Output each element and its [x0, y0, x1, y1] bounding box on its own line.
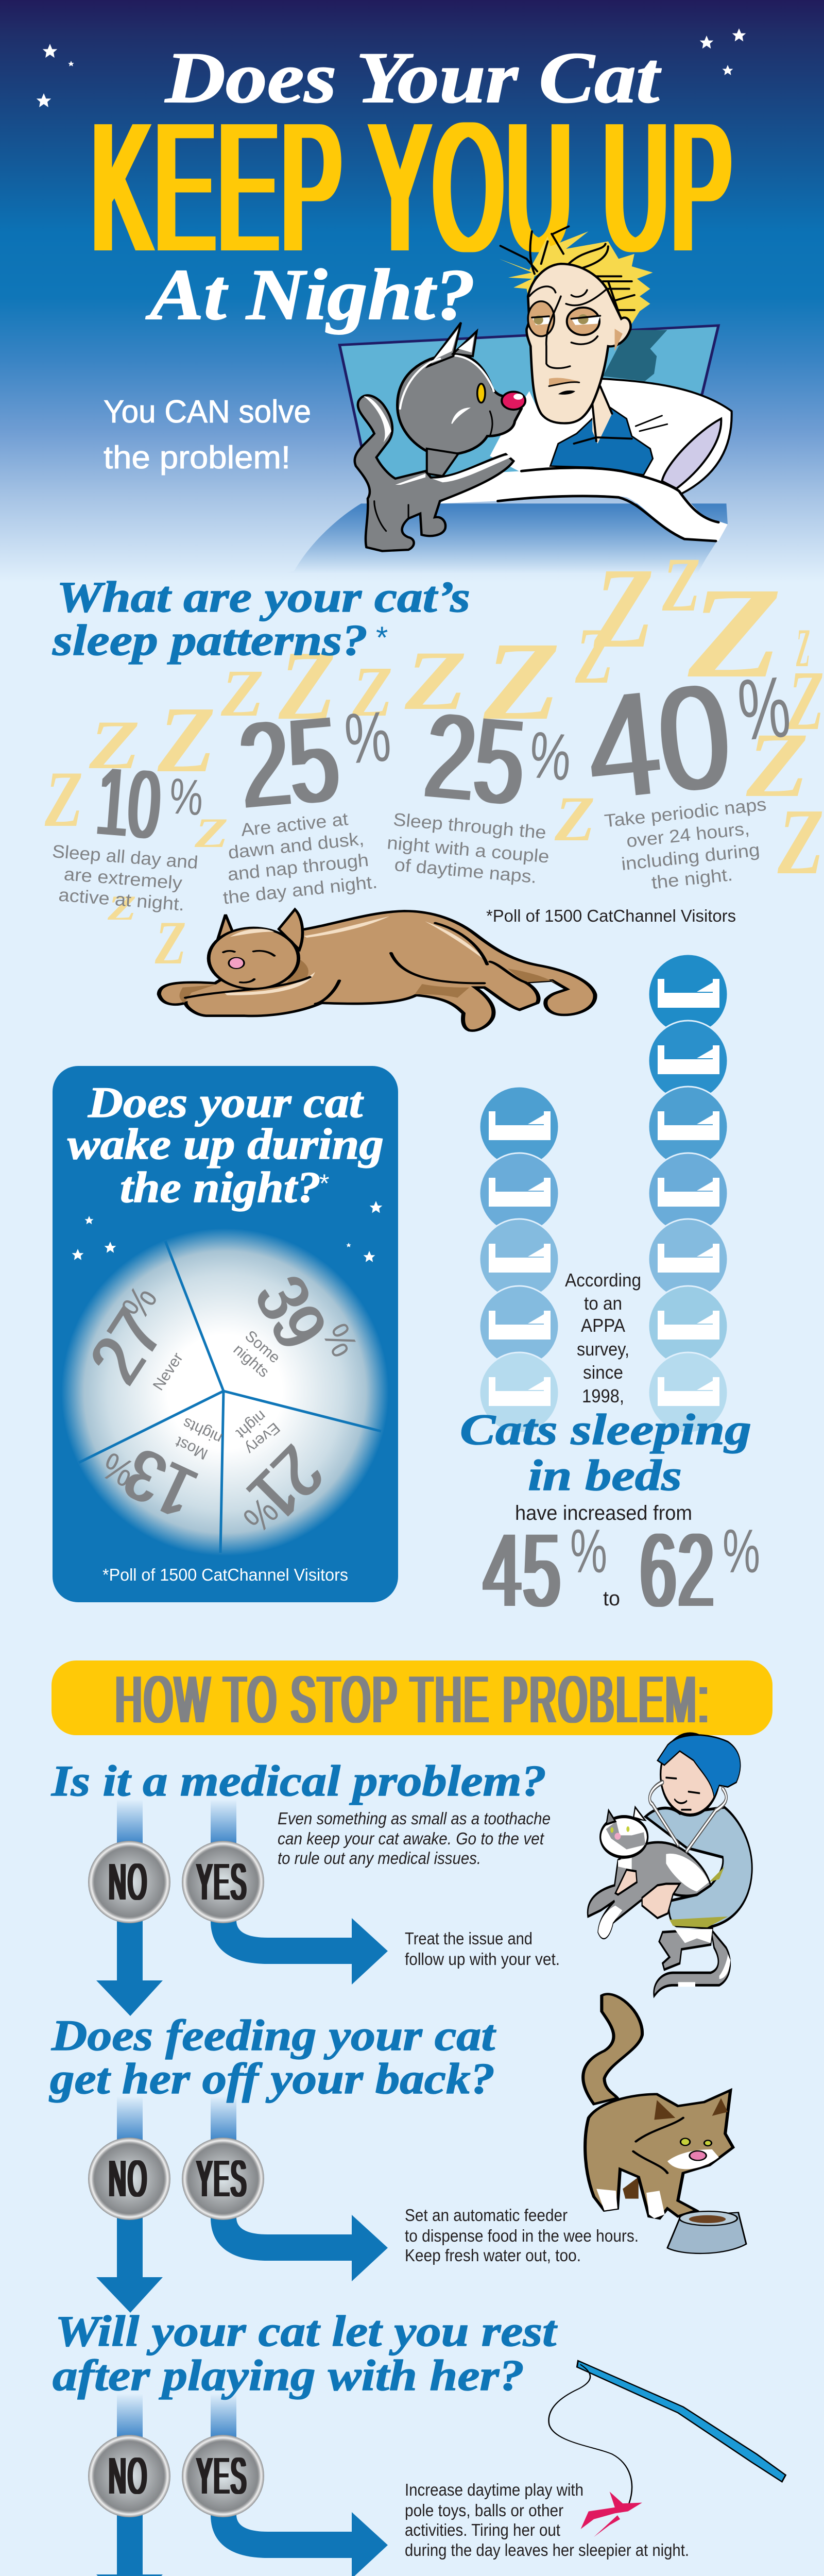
stat: 25 percent sleep through the night [386, 688, 574, 887]
slice label: 39 percent some nights: Some [242, 1327, 283, 1367]
stat: 45 to 62 percent [484, 1502, 760, 1628]
heading: sleep patterns [52, 573, 470, 665]
decorative z letters: Z [483, 619, 560, 743]
stat: 10 percent: Sleep all day and [52, 841, 199, 873]
heading: cats sleeping in beds [460, 1405, 751, 1500]
stat: 25 percent sleep through the night: night with a couple [386, 833, 550, 867]
stat: 10 percent [52, 748, 205, 915]
flow 1: answer text: follow up with your vet. [405, 1950, 560, 1969]
decorative z letters: Z [220, 656, 264, 730]
decorative z letters: Z [554, 784, 595, 855]
panel heading: * [319, 1169, 329, 1198]
stars [37, 28, 746, 107]
stat: 25 percent active at dawn and dusk: Are active at [240, 809, 349, 840]
slice label: 21 percent every night: night [233, 1407, 269, 1442]
decorative z letters: Z [662, 543, 700, 628]
slice label: 21 percent every night: Every [242, 1419, 283, 1458]
illustration: vet holding calico cat [588, 1734, 752, 1996]
text: APPA survey: since [583, 1362, 623, 1383]
decorative z letters [44, 543, 824, 977]
stat: 45 to 62 percent: 62 [640, 1512, 716, 1628]
stat: 25 percent active at dawn and dusk: the day and night. [222, 872, 379, 908]
heading: sleep patterns: sleep patterns? [52, 616, 368, 665]
flow 3: answer text: activities. Tiring her out [405, 2520, 560, 2539]
flow 2: NO button and down arrow [88, 2096, 170, 2313]
subtitle: the problem! [104, 440, 290, 476]
flow 1: answer text [405, 1929, 560, 1969]
slice label: 27 percent never: 27 [74, 1296, 179, 1396]
question 1 description: Even something as small as a toothache [278, 1809, 551, 1828]
heading: sleep patterns: * [376, 620, 388, 655]
flow 3: answer text: Increase daytime play with [405, 2480, 583, 2499]
pie chart [61, 1228, 389, 1556]
title [92, 38, 735, 335]
flow 2: NO button and down arrow: NO [109, 2150, 148, 2208]
flow 3: answer text [405, 2480, 689, 2560]
flow 1: answer text: Treat the issue and [405, 1929, 533, 1948]
stat: 25 percent sleep through the night: of daytime naps. [393, 855, 538, 887]
slice label: 13 percent most nights: Most [173, 1433, 211, 1463]
poll footnote: *Poll of 1500 CatChannel Visitors [486, 906, 736, 925]
heading: sleep patterns: What are your cat’s [57, 573, 470, 621]
stat: 25 percent sleep through the night: Sleep through the [392, 809, 547, 843]
stat: 10 percent: active at night. [58, 885, 185, 915]
illustration: pole toy with ribbon [549, 2361, 785, 2537]
stat: 40 percent periodic naps: % [734, 658, 794, 759]
stat: 25 percent active at dawn and dusk: 25 [235, 691, 344, 834]
panel: does your cat wake up during the night [53, 1066, 398, 1602]
slice label: 39 percent some nights: % [314, 1317, 366, 1363]
night sky gradient [0, 0, 824, 582]
flow 2: YES button and right arrow: YES [197, 2150, 248, 2208]
flow 2: answer text [405, 2206, 639, 2265]
stat: 25 percent active at dawn and dusk: dawn and dusk, [227, 828, 365, 863]
text: APPA survey: 1998, [582, 1385, 624, 1406]
subtitle [104, 394, 311, 476]
slice label: 13 percent most nights: % [95, 1444, 141, 1495]
decorative z letters: Z [685, 561, 782, 705]
text: APPA survey: APPA [581, 1315, 625, 1336]
illustration: sleeping tan cat [159, 909, 595, 1030]
heading: cats sleeping in beds: Cats sleeping [460, 1405, 751, 1454]
question 3 heading: Will your cat let you rest [55, 2307, 558, 2355]
stat: 40 percent periodic naps [580, 652, 794, 893]
pictogram: beds, left column 45 percent [479, 1087, 559, 1433]
decorative z letters: Z [746, 714, 809, 816]
slice label: 21 percent every night: % [235, 1489, 286, 1540]
panel footnote: *Poll of 1500 CatChannel Visitors [102, 1565, 348, 1584]
panel heading: Does your cat [88, 1078, 364, 1127]
question 3 heading [53, 2307, 558, 2400]
stat: 25 percent active at dawn and dusk: and nap through [227, 850, 370, 885]
question 1 description: to rule out any medical issues. [278, 1849, 481, 1868]
flow 1: YES button and right arrow: YES [197, 1853, 248, 1911]
flow 2: answer text: to dispense food in the wee hours. [405, 2226, 639, 2245]
stat: 40 percent periodic naps: Take periodic naps [604, 794, 767, 831]
decorative z letters: Z [593, 544, 654, 671]
question 2 heading: Does feeding your cat [51, 2011, 496, 2060]
stat: 25 percent active at dawn and dusk [222, 691, 393, 908]
question 1 heading: Is it a medical problem? [51, 1757, 546, 1805]
subtitle: You CAN solve [104, 394, 311, 430]
panel heading: wake up during [67, 1120, 384, 1168]
panel stars [72, 1201, 382, 1262]
stat: 45 to 62 percent: % [570, 1517, 607, 1586]
stat: 45 to 62 percent: 45 [484, 1512, 562, 1628]
slice label: 27 percent never: Never [150, 1350, 186, 1394]
panel heading: the night? [120, 1163, 321, 1212]
decorative z letters: Z [796, 617, 810, 678]
decorative z letters: Z [278, 631, 336, 740]
illustration: brown cat eating from bowl [583, 1994, 746, 2253]
stat: 45 to 62 percent: % [723, 1517, 760, 1586]
title: At Night? [145, 255, 475, 335]
stat: 40 percent periodic naps: over 24 hours, [625, 819, 750, 851]
illustration: tired man in bed and grey cat [285, 226, 732, 573]
slice label: 13 percent most nights: 13 [113, 1433, 208, 1534]
text: APPA survey [565, 1269, 641, 1406]
stat: 10 percent: are extremely [63, 864, 183, 893]
decorative z letters: Z [777, 789, 824, 894]
question 1 description: can keep your cat awake. Go to the vet [278, 1829, 545, 1848]
question 3 heading: after playing with her? [53, 2351, 524, 2400]
text: APPA survey: survey, [577, 1338, 629, 1360]
decorative z letters: Z [157, 687, 215, 792]
stat: 40 percent periodic naps: including during [620, 840, 761, 874]
decorative z letters: Z [575, 612, 614, 700]
decorative z letters: Z [89, 707, 140, 784]
panel heading [67, 1078, 384, 1212]
decorative z letters: Z [107, 889, 136, 927]
flow 3: NO button and down arrow: NO [109, 2447, 148, 2505]
decorative z letters: Z [404, 634, 467, 727]
flow 1: NO button and down arrow [88, 1800, 170, 2016]
stat: 25 percent sleep through the night: % [527, 718, 574, 795]
question 1 description [278, 1809, 551, 1868]
stat: 10 percent: % [168, 767, 205, 826]
text: APPA survey: to an [584, 1293, 622, 1314]
flow 2: answer text: Set an automatic feeder [405, 2206, 568, 2225]
flow 3: answer text: during the day leaves her sleepier at night. [405, 2540, 689, 2560]
stat: 40 percent periodic naps: 40 [580, 652, 738, 831]
question 2 heading: get her off your back? [49, 2055, 495, 2103]
stat: 40 percent periodic naps: the night. [650, 865, 733, 893]
decorative z letters: Z [154, 908, 186, 977]
flow 3: answer text: pole toys, balls or other [405, 2501, 563, 2520]
flow 3: NO button and down arrow [88, 2394, 170, 2576]
decorative z letters: Z [194, 810, 228, 856]
stat: 10 percent: 10 [93, 748, 164, 859]
stat: 25 percent sleep through the night: 25 [421, 688, 530, 830]
flow 1: YES button and right arrow [182, 1800, 388, 1985]
decorative z letters: Z [352, 652, 392, 731]
flow 3: YES button and right arrow: YES [197, 2447, 248, 2505]
text: APPA survey: According [565, 1269, 641, 1291]
heading: cats sleeping in beds: in beds [528, 1451, 682, 1500]
slice label: 39 percent some nights: nights [230, 1341, 272, 1381]
slice label: 27 percent never: % [113, 1278, 165, 1327]
decorative z letters: Z [44, 755, 83, 844]
title: Does Your Cat [164, 38, 661, 118]
flow 3: YES button and right arrow [182, 2394, 388, 2576]
flow 1: NO button and down arrow: NO [109, 1853, 148, 1911]
stat: 45 to 62 percent: to [603, 1587, 620, 1610]
pictogram: beds, right column 62 percent [648, 954, 728, 1433]
stat: 45 to 62 percent: have increased from [515, 1502, 692, 1524]
flow 2: YES button and right arrow [182, 2096, 388, 2281]
decorative z letters: Z [787, 653, 824, 748]
slice label: 21 percent every night: 21 [234, 1431, 338, 1536]
stat: 25 percent active at dawn and dusk: % [342, 697, 393, 779]
slice label: 39 percent some nights: 39 [240, 1264, 342, 1361]
flow 2: answer text: Keep fresh water out, too. [405, 2246, 581, 2265]
slice label: 13 percent most nights: nights [180, 1414, 225, 1447]
question 2 heading [49, 2011, 496, 2103]
